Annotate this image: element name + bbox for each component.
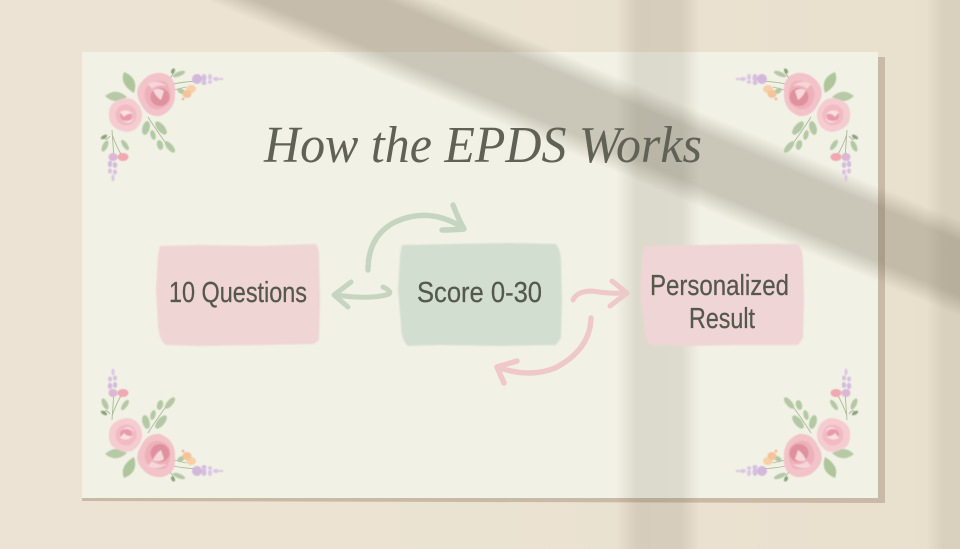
floral corner: top left xyxy=(100,68,224,182)
step box: Score 0-30 xyxy=(398,243,562,346)
floral corner: bottom left xyxy=(100,368,224,482)
arrow: green left to 10 Questions xyxy=(334,282,390,307)
window light shadow: right edge band xyxy=(926,0,960,549)
floral corner: top right xyxy=(736,68,859,182)
step box: 10 Questions: 10 Questions xyxy=(169,277,307,309)
arrow: pink curved down to the left xyxy=(497,318,591,383)
step box: Personalized Result: Personalized xyxy=(650,270,789,302)
step box: Personalized Result xyxy=(640,244,804,346)
floral corner: bottom right xyxy=(736,368,859,482)
arrow: pink right to Personalized Result xyxy=(573,281,627,306)
paper card xyxy=(82,52,878,498)
window light shadow: vertical band xyxy=(616,0,700,549)
step box: Personalized Result: Result xyxy=(689,303,755,335)
arrow: green curved up to the right xyxy=(368,205,464,270)
window light shadow: diagonal band xyxy=(205,0,960,317)
paper drop shadow xyxy=(82,57,885,503)
step box: Score 0-30: Score 0-30 xyxy=(417,277,542,309)
title: How the EPDS Works xyxy=(263,117,702,174)
step box: 10 Questions xyxy=(156,244,320,346)
